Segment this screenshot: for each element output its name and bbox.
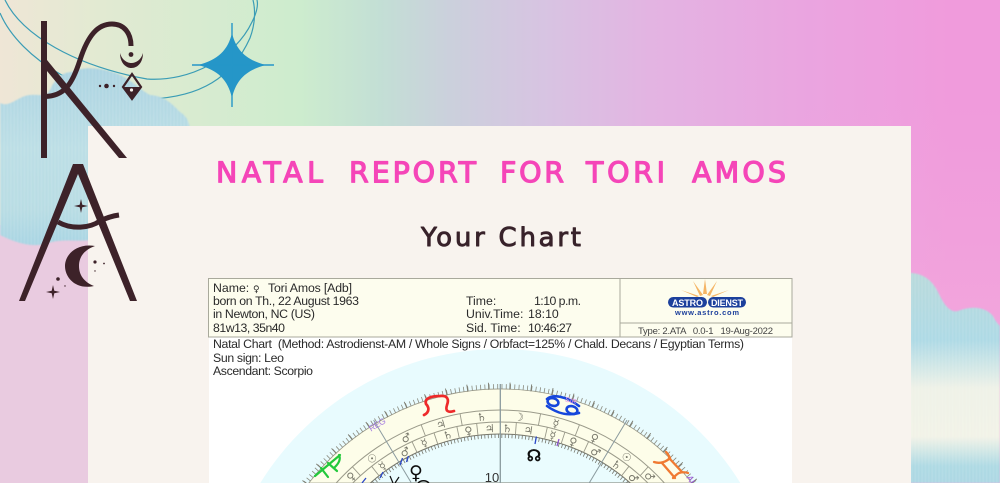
- chart method text: Natal Chart (Method: Astrodienst-AM / Whole Signs / Orbfact=125% / Chald. Decans / Egyptian Terms): [213, 337, 744, 351]
- birth data: Time:: [466, 294, 496, 308]
- subheading: Your Chart: [420, 223, 581, 253]
- birth data: Tori Amos [Adb]: [268, 281, 352, 295]
- decan and term separators: [352, 414, 648, 476]
- decan planet glyphs: ♀: [588, 431, 601, 446]
- title: TORI: [585, 156, 665, 190]
- term planet glyphs: ♄: [502, 422, 513, 435]
- astrodienst logo: ASTRO: [672, 298, 703, 308]
- birth data: 1:10 p.m.: [534, 294, 581, 308]
- chart method text: Ascendant: Scorpio: [213, 364, 313, 378]
- monogram letter K with symbols: [41, 21, 143, 158]
- decan planet glyphs: [344, 410, 657, 483]
- chart type line: Type: 2.ATA 0.0-1 19-Aug-2022: [638, 326, 773, 337]
- monogram letter A with moon and stars: [19, 164, 137, 301]
- astrodienst logo: [668, 279, 746, 317]
- birth data: Univ.Time:: [466, 307, 523, 321]
- birth data: 81w13, 35n40: [213, 321, 285, 335]
- term planet glyphs: ☿: [376, 459, 389, 473]
- astrology report sheet: [208, 278, 792, 483]
- term planet glyphs: ♄: [609, 457, 624, 473]
- icon: crescent and dot: [120, 52, 143, 68]
- title: REPORT: [349, 156, 477, 190]
- icon: diamond eye: [123, 74, 141, 100]
- astrodienst logo: DIENST: [711, 298, 744, 308]
- fixed star labels: [367, 397, 699, 483]
- term planet glyphs: ☿: [548, 428, 558, 443]
- birth data: born on Th., 22 August 1963: [213, 294, 359, 308]
- birth data: in Newton, NC (US): [213, 307, 315, 321]
- decan planet glyphs: ♂: [399, 430, 414, 446]
- icon: three dots: [99, 84, 115, 88]
- term planet glyphs: ♂: [588, 444, 603, 460]
- planet markers: [362, 436, 559, 483]
- watercolor cloud left: [0, 68, 190, 245]
- decan planet glyphs: ☉: [619, 449, 634, 466]
- watercolor cloud right: [905, 273, 1000, 483]
- sign glyph: Leo: [424, 396, 454, 415]
- thin orbit line behind cloud: [0, 0, 255, 99]
- decan planet glyphs: ♄: [476, 410, 487, 424]
- fixed star labels: SIR: [564, 397, 577, 406]
- term planet glyphs: ♃: [484, 422, 495, 436]
- sign glyph: Virgo: [315, 455, 340, 477]
- birth data: Name:: [213, 281, 249, 295]
- term planet glyphs: ♃: [523, 423, 534, 438]
- chart wheel: [260, 349, 740, 483]
- decan planet glyphs: ☉: [365, 451, 380, 467]
- title: [216, 156, 786, 190]
- icon: crescent moon: [65, 246, 95, 287]
- title: FOR: [500, 156, 564, 190]
- blue four-point star: [192, 23, 274, 107]
- term planet glyphs: ♀: [567, 434, 579, 449]
- decan planet glyphs: ☿: [551, 417, 561, 431]
- decan planet glyphs: ☽: [514, 410, 524, 424]
- birth data: 10:46:27: [528, 321, 572, 335]
- term planet glyphs: ♄: [441, 428, 454, 443]
- sign glyph: Gemini: [654, 452, 688, 478]
- birth data: ♀: [253, 285, 260, 295]
- birth data: Sid. Time:: [466, 321, 521, 335]
- term planet glyphs: ♀: [464, 424, 474, 438]
- icon: small stars and dots: [46, 199, 105, 299]
- term planet glyphs: ♂: [398, 444, 413, 460]
- term planet glyphs: [376, 422, 641, 483]
- birth data: 18:10: [528, 307, 559, 321]
- chart method text: Sun sign: Leo: [213, 351, 284, 365]
- planet symbols and house number: [390, 446, 541, 483]
- decan planet glyphs: ♃: [435, 417, 448, 432]
- thin orbit line over cloud: [5, 0, 257, 79]
- sign glyph: Cancer: [547, 396, 579, 415]
- birth data: [213, 281, 581, 335]
- title: AMOS: [692, 156, 786, 190]
- title: NATAL: [216, 156, 323, 190]
- planet symbols and house number: ☊: [527, 446, 541, 465]
- astrodienst logo: www.astro.com: [674, 308, 739, 317]
- chart method text: [213, 337, 744, 378]
- house lines: [374, 384, 627, 483]
- chart header box: [208, 278, 792, 337]
- report card panel: [88, 126, 911, 483]
- fixed star labels: REG: [367, 416, 387, 433]
- term planet glyphs: ☿: [419, 436, 430, 451]
